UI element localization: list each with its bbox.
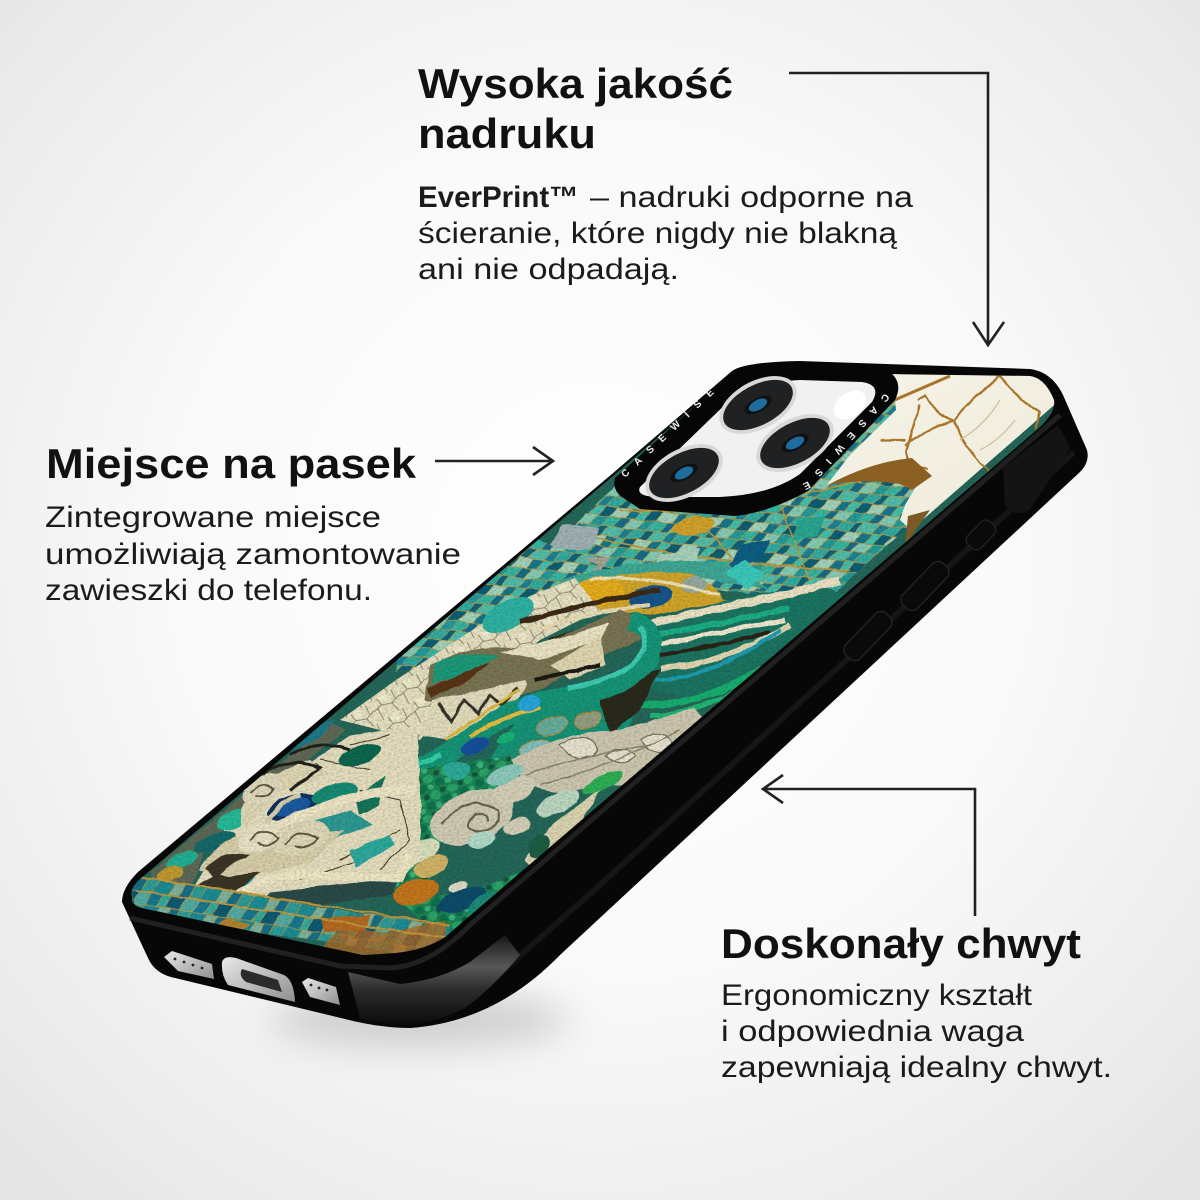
flowing dragon mane [520, 580, 860, 716]
cream swirl clouds [198, 760, 415, 906]
phone shadow [270, 992, 570, 1048]
dark teal gems and holes [150, 720, 400, 905]
description: EverPrint™ [418, 181, 579, 214]
callout: print quality [418, 60, 914, 286]
case body silhouette [122, 361, 1088, 1028]
description: ani nie odpadają. [418, 253, 679, 286]
right lens [747, 402, 843, 484]
arrow: grip [763, 775, 975, 916]
crack lines on rock [300, 735, 410, 880]
cream rock behind lower clouds [195, 725, 420, 905]
printed artwork [120, 360, 1070, 970]
heading: nadruku [418, 110, 596, 157]
glossy corner highlight [348, 935, 520, 1026]
emerald and pebble field [392, 755, 623, 940]
brand ring text: CASEWISE [802, 394, 889, 490]
dragon head and mouth [420, 610, 642, 740]
dark branch horns [262, 745, 350, 790]
dragon body arc [320, 620, 652, 773]
marble [826, 366, 1060, 545]
description: i odpowiednia waga [721, 1015, 1025, 1048]
description: zawieszki do telefonu. [45, 574, 372, 607]
side button: volume up [898, 558, 952, 614]
jade scale gems [490, 669, 661, 760]
description [418, 181, 914, 286]
fine grain overlay [132, 402, 1053, 955]
right speaker [302, 978, 340, 1005]
charging port [222, 957, 295, 1002]
description: zapewniają idealny chwyt. [721, 1051, 1112, 1084]
heading: Doskonały chwyt [721, 920, 1081, 967]
teal blob [482, 597, 534, 633]
bottom stained glass band [132, 876, 450, 955]
brand ring text: CASEWISE [622, 388, 714, 476]
upper clouds [510, 708, 715, 792]
phone case [122, 361, 1088, 1028]
top lens [710, 364, 806, 446]
description [45, 501, 461, 607]
side button: power [841, 608, 895, 664]
description: umożliwiają zamontowanie [45, 538, 461, 571]
side button: action [963, 517, 999, 553]
left speaker [164, 951, 214, 979]
arrow: print quality [789, 73, 1004, 345]
left lens [636, 432, 732, 514]
stained glass upper band [550, 374, 916, 602]
island ring [614, 363, 898, 516]
callout: strap mount [45, 440, 461, 607]
cream crackle sky [340, 578, 600, 740]
heading: Wysoka jakość [418, 60, 733, 107]
case bezel highlight [130, 415, 1060, 968]
side rim band [490, 452, 1074, 982]
description [721, 979, 1112, 1084]
gold moon and blue eye [560, 560, 770, 615]
heading [418, 60, 733, 157]
description: Zintegrowane miejsce [45, 501, 381, 534]
description: ścieranie, które nigdy nie blakną [418, 217, 898, 250]
left teal lead-glass strip [396, 540, 600, 672]
description: Ergonomiczny kształt [721, 979, 1032, 1012]
arrow: strap mount [435, 447, 553, 475]
description: – nadruki odporne na [590, 181, 914, 214]
heading: Miejsce na pasek [46, 440, 417, 487]
camera island [614, 372, 898, 516]
side grip panel [1003, 425, 1070, 513]
flash [828, 385, 872, 425]
brand ring text [622, 388, 889, 490]
island inner plate [639, 380, 875, 497]
callout: grip [721, 920, 1112, 1084]
